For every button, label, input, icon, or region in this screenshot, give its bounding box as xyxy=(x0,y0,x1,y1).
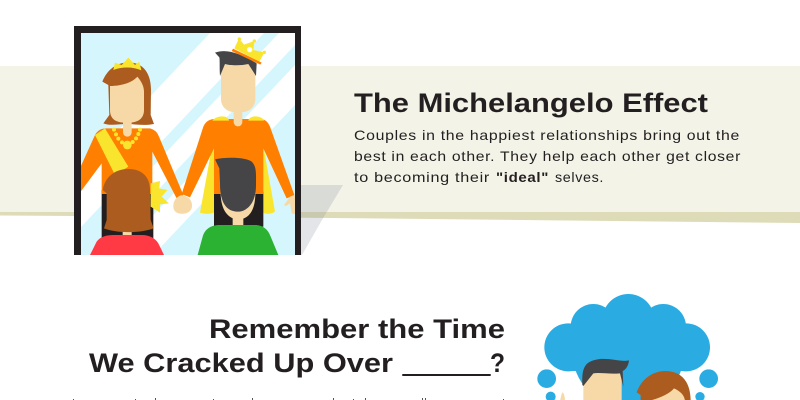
woman seen from behind xyxy=(90,169,164,255)
mirror glass with diagonal reflections xyxy=(81,33,295,269)
cream background band xyxy=(0,66,800,223)
body text: Michelangelo effect description: Couples in the happiest relationships bring out the xyxy=(354,127,740,143)
heading: The Michelangelo Effect: The Michelangelo Effect xyxy=(354,88,708,118)
reflected queen xyxy=(81,58,183,238)
reflected couple xyxy=(81,37,295,255)
heading: Remember the Time: ______ xyxy=(402,348,491,378)
heading: Remember the Time: ? xyxy=(490,348,505,378)
mirror illustration xyxy=(74,26,301,269)
thought cloud illustration xyxy=(537,294,718,400)
thought cloud xyxy=(544,294,710,400)
king's crown xyxy=(232,37,266,65)
body text: Michelangelo effect description: "ideal" xyxy=(496,169,549,185)
held hands xyxy=(173,195,192,214)
heading: Remember the Time xyxy=(89,314,505,378)
mirror frame xyxy=(74,26,301,260)
clipped tips of the next text line xyxy=(73,398,504,400)
reflected king xyxy=(182,37,295,227)
raised finger xyxy=(560,392,565,400)
small thought bubbles xyxy=(537,369,718,400)
spark between the hands xyxy=(151,181,169,213)
heading: Remember the Time: We Cracked Up Over xyxy=(89,348,394,378)
body text: Michelangelo effect description: selves. xyxy=(555,169,604,185)
man xyxy=(582,359,629,400)
body text: Michelangelo effect description xyxy=(354,127,741,185)
body text: Michelangelo effect description: best in each other. They help each other get closer xyxy=(354,148,741,164)
mirror cast shadow xyxy=(300,185,343,255)
body text: Michelangelo effect description: to becoming their xyxy=(354,169,490,185)
woman xyxy=(637,371,691,400)
heading: Remember the Time: Remember the Time xyxy=(209,314,505,344)
man seen from behind xyxy=(198,158,278,255)
